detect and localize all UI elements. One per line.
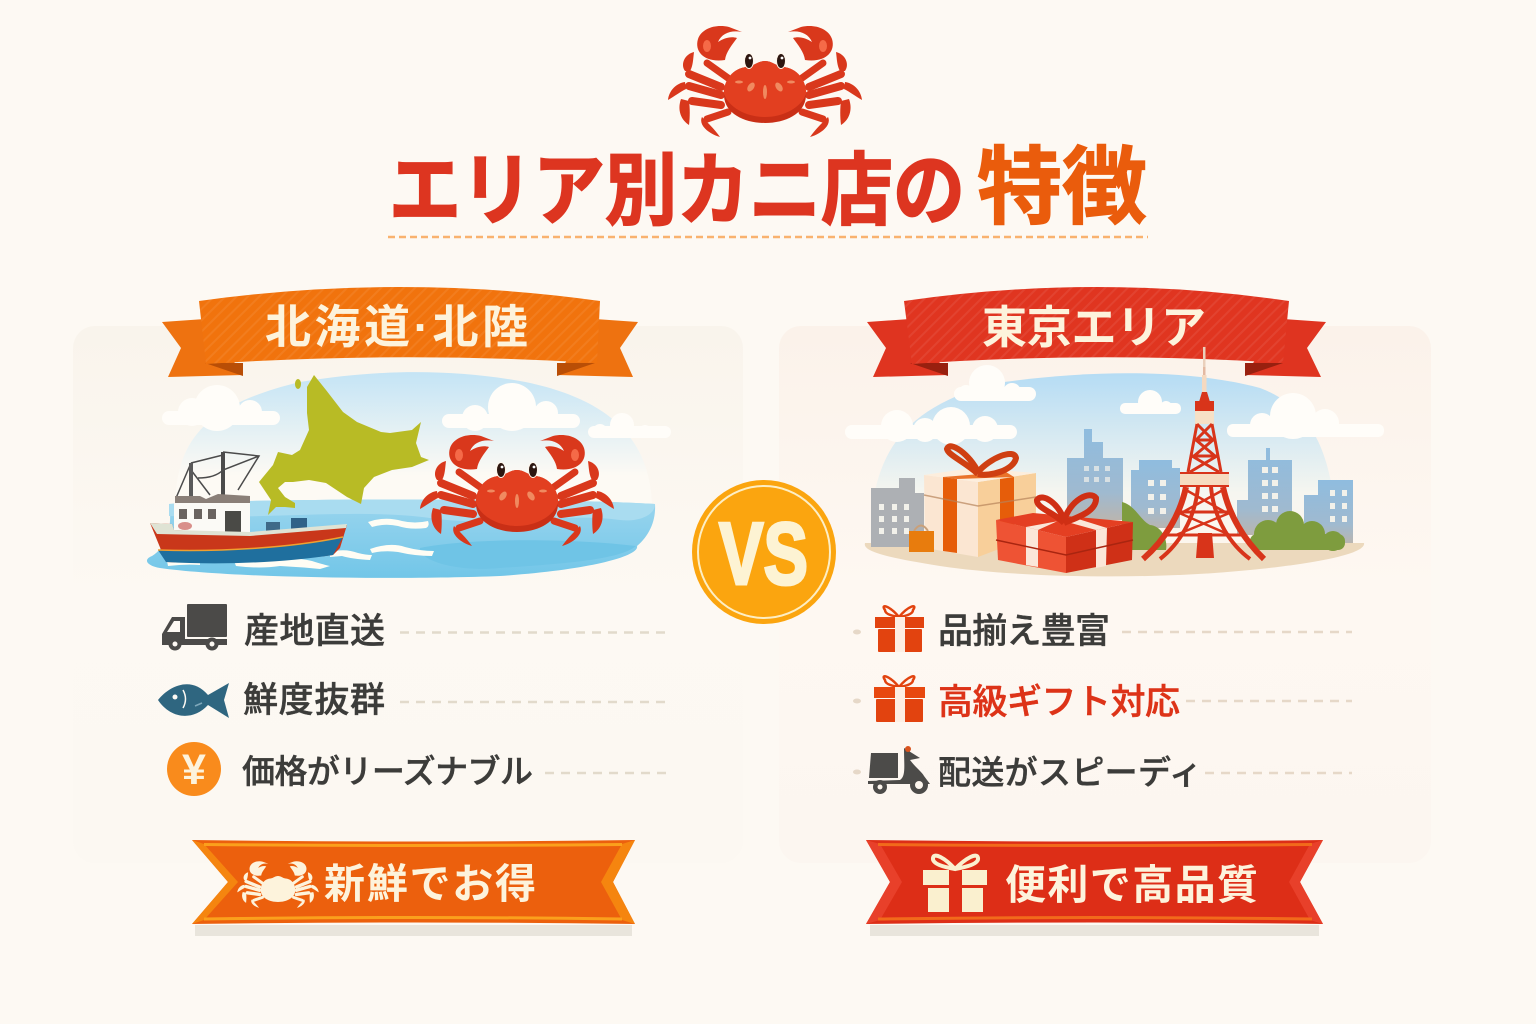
VS badge: VS [719, 504, 808, 603]
list: 配送がスピーディ: 配送がスピーディ [938, 754, 1202, 791]
Tokyo Tower [1143, 347, 1264, 559]
small orange bag [909, 526, 934, 552]
list: 価格がリーズナブル [167, 742, 667, 796]
icon: gift [875, 606, 924, 652]
icon: fish [158, 683, 229, 718]
icon: top crab [668, 26, 862, 137]
list: 品揃え豊富 [853, 606, 1352, 652]
list: 産地直送 [162, 604, 667, 651]
icon: cream gift [923, 856, 987, 912]
sky [870, 373, 1336, 545]
title: エリア別カニ店の [389, 147, 965, 236]
ground [865, 543, 1364, 576]
ribbon: Tokyo heading: 東京エリア [982, 302, 1206, 353]
ribbon: Hokkaido heading [162, 287, 638, 377]
tower tip over ribbon [1203, 347, 1206, 367]
banner: 新鮮でお得 [192, 840, 635, 936]
bushes [1122, 502, 1345, 551]
clouds [845, 365, 1384, 445]
panel background right [779, 326, 1431, 863]
illustration: city with gifts and Tokyo Tower [845, 347, 1384, 576]
banner: 便利で高品質: 便利で高品質 [1005, 862, 1258, 908]
list: 品揃え豊富: 品揃え豊富 [938, 612, 1110, 651]
ribbon: Hokkaido heading: 北海道·北陸 [265, 301, 528, 353]
list: 配送がスピーディ [853, 746, 1352, 794]
icon: yen coin: ¥ [182, 746, 206, 794]
sky [175, 372, 652, 510]
fishing boat [150, 452, 347, 563]
panel: Hokkaido and Hokuriku [73, 287, 743, 936]
title dashed underline [388, 236, 1148, 238]
panel background left [73, 326, 743, 863]
icon: yen coin [167, 742, 221, 796]
icon: gift [874, 676, 925, 722]
icon: delivery scooter [868, 746, 930, 794]
large gift box [924, 446, 1036, 557]
illustration: sea with Hokkaido, boat and crab [147, 372, 671, 578]
sea [147, 500, 655, 578]
list: 高級ギフト対応 [853, 676, 1352, 722]
title: 特徴 [977, 141, 1147, 236]
list: 産地直送: 産地直送 [244, 612, 385, 651]
list: 高級ギフト対応: 高級ギフト対応 [938, 683, 1180, 722]
buildings [871, 429, 1353, 547]
VS badge [692, 480, 836, 624]
panel: Tokyo area [779, 287, 1431, 936]
icon: cream crab [237, 861, 319, 908]
clouds [162, 383, 671, 438]
list: 鮮度抜群 [158, 681, 667, 720]
banner: 新鮮でお得: 新鮮でお得 [324, 861, 536, 907]
list: 価格がリーズナブル: 価格がリーズナブル [242, 753, 533, 790]
Hokkaido map [259, 375, 429, 515]
crab [420, 435, 614, 546]
ribbon: Tokyo heading [867, 287, 1326, 377]
list: 鮮度抜群: 鮮度抜群 [243, 681, 385, 720]
red gift box [996, 495, 1133, 573]
icon: truck [162, 604, 227, 650]
banner: 便利で高品質 [866, 840, 1323, 936]
